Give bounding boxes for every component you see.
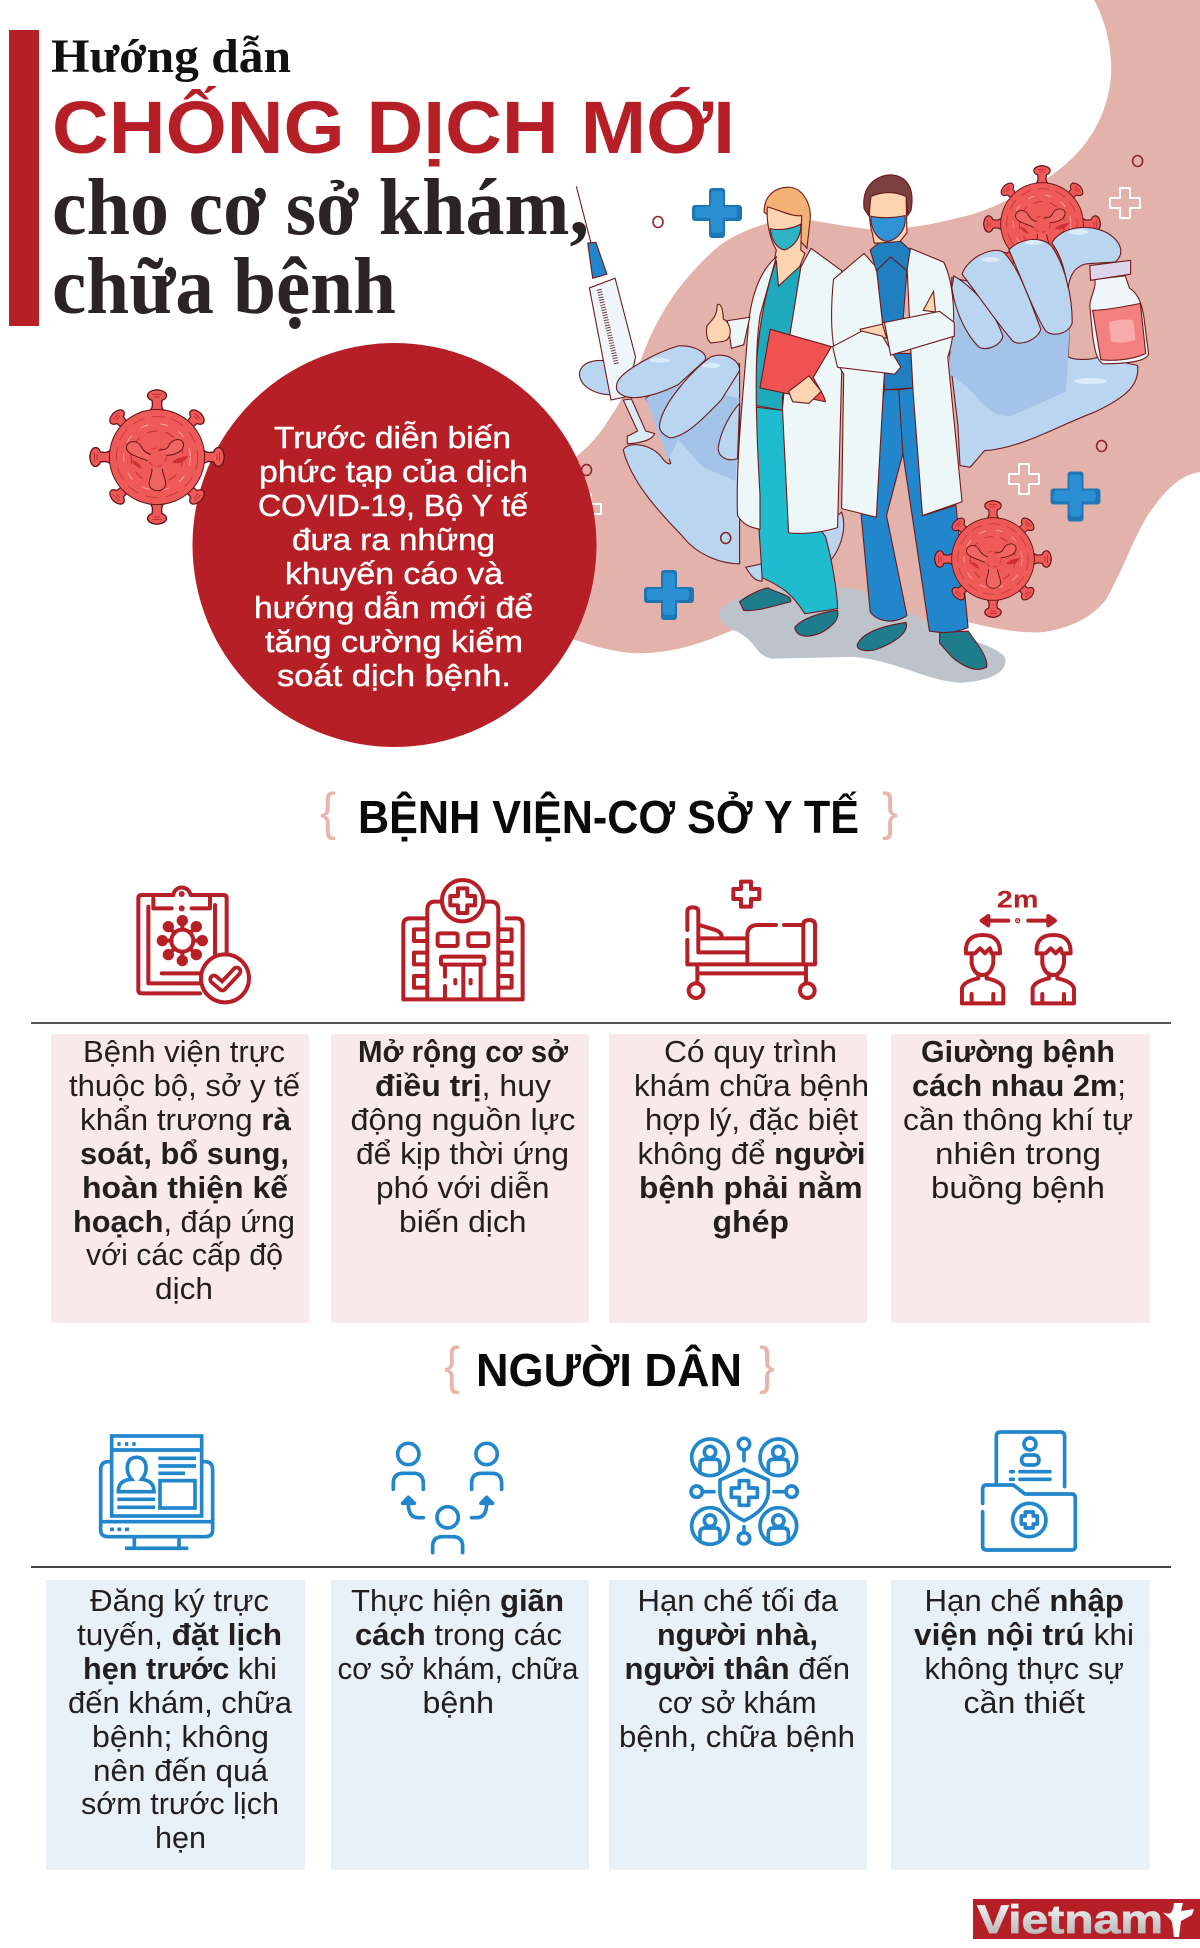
icon: clipboard with virus and check: [138, 887, 249, 1002]
card: hospital 3: bệnh phải nằm: [639, 1169, 862, 1205]
card: hospital 1: khẩn trương rà: [80, 1102, 292, 1137]
card: hospital 4: Giường bệnh: [921, 1034, 1115, 1069]
doctors and hands artwork: [576, 175, 1149, 683]
card: hospital 1: soát, bổ sung,: [80, 1136, 289, 1171]
card: citizens 1: Đăng ký trực: [90, 1583, 269, 1618]
icon: online booking monitor: [101, 1436, 213, 1548]
intro circle: Trước diễn biến: [274, 420, 511, 455]
card: hospital 2: để kịp thời ứng: [356, 1136, 569, 1171]
vial: [1090, 260, 1149, 364]
icon: two people 2m apart: [962, 886, 1074, 1003]
intro circle: phức tạp của dịch: [259, 455, 528, 489]
icons row: citizens: [101, 1436, 502, 1553]
left hand fingers: [616, 346, 740, 460]
card: hospital 4: cách nhau 2m;: [912, 1068, 1126, 1103]
card: hospital 1: Bệnh viện trực: [83, 1034, 285, 1069]
card: citizens 3: cơ sở khám: [658, 1685, 816, 1720]
card: hospital 2: động nguồn lực: [350, 1102, 576, 1137]
card: citizens 4: Hạn chế nhập: [924, 1583, 1124, 1618]
small ring decorations: [582, 156, 1143, 544]
intro circle: tăng cường kiểm: [265, 625, 523, 659]
card: hospital 4: cần thông khí tự: [903, 1102, 1133, 1137]
card: hospital 2: điều trị, huy: [375, 1068, 552, 1103]
card: citizens 3: [609, 1580, 867, 1870]
heading: citizens: }: [759, 1337, 775, 1395]
icon: virus left of circle: [90, 390, 224, 524]
title: CHỐNG DỊCH MỚI: [52, 86, 735, 169]
icon: people keeping distance: [393, 1443, 502, 1553]
icon: white cross upper: [1110, 188, 1140, 218]
intro circle: [192, 343, 596, 747]
title: cho cơ sở khám,: [52, 164, 589, 252]
icon: white cross lower: [1009, 464, 1039, 494]
icons row: citizens continued: [691, 1432, 1075, 1550]
logo: Vietnam+: Vietnam: [977, 1898, 1163, 1942]
heading: citizens: {: [444, 1337, 460, 1395]
card: hospital 3: hợp lý, đặc biệt: [645, 1102, 858, 1137]
card: citizens 1: hẹn: [155, 1820, 206, 1855]
card: hospital 2: biến dịch: [399, 1204, 526, 1239]
heading: hospitals: {: [320, 783, 336, 841]
card: citizens 2: [331, 1580, 589, 1870]
card: hospital 4: nhiên trong: [935, 1136, 1101, 1171]
left gloved hand: [580, 361, 844, 581]
icon: virus bottom: [935, 501, 1051, 617]
icon: virus behind right hand: [984, 166, 1100, 282]
icon: hospital bed: [687, 882, 815, 998]
card: citizens 1: hẹn trước khi: [83, 1651, 277, 1686]
card: hospital 2: phó với diễn: [376, 1170, 550, 1205]
title: [51, 30, 735, 331]
card: citizens 4: không thực sự: [924, 1651, 1124, 1686]
divider: [31, 1566, 1171, 1568]
card: citizens 2: cơ sở khám, chữa: [338, 1651, 579, 1686]
card: hospital 2: Mở rộng cơ sở: [358, 1034, 569, 1069]
logo: Vietnam+: [973, 1898, 1200, 1942]
title: chữa bệnh: [52, 243, 396, 331]
divider: [31, 1022, 1171, 1024]
intro circle: đưa ra những: [292, 523, 495, 557]
icon: two people 2m apart: 2m: [997, 886, 1038, 913]
card: hospital 4: buồng bệnh: [931, 1170, 1105, 1205]
icons row: hospitals: [138, 880, 523, 1002]
card: hospital 3: khám chữa bệnh: [634, 1068, 869, 1103]
icon: hospital building: [403, 880, 523, 999]
right doctor: [832, 175, 987, 669]
card: hospital 3: ghép: [712, 1204, 789, 1239]
card: hospital 1: hoạch, đáp ứng: [73, 1204, 295, 1239]
card: hospital 3: không để người: [638, 1136, 866, 1171]
icon: blue cross bottom: [644, 570, 694, 620]
intro circle: khuyến cáo và: [285, 557, 503, 591]
card: citizens 4: viện nội trú khi: [914, 1617, 1134, 1652]
title bar: [9, 30, 39, 326]
card: citizens 1: tuyến, đặt lịch: [77, 1617, 282, 1652]
card: citizens 1: sớm trước lịch: [81, 1786, 279, 1821]
intro circle: hướng dẫn mới để: [254, 590, 533, 625]
icon: white cross behind circle: [571, 494, 601, 524]
card: hospital 1: dịch: [155, 1271, 213, 1306]
card: citizens 3: người nhà,: [657, 1617, 818, 1652]
heading: hospitals: BỆNH VIỆN-CƠ SỞ Y TẾ: [358, 791, 859, 843]
card: hospital 3: [609, 1034, 869, 1323]
illustration: doctors, gloved hands, syringe and vial: [571, 156, 1149, 683]
icon: medical folder with document: [983, 1432, 1075, 1550]
card: citizens 4: cần thiết: [964, 1685, 1085, 1720]
card: hospital 1: thuộc bộ, sở y tế: [69, 1068, 300, 1103]
left doctor: [707, 187, 842, 636]
card: citizens 2: bệnh: [422, 1685, 494, 1720]
heading: hospitals: }: [882, 783, 898, 841]
card: hospital 4: [891, 1034, 1150, 1323]
icon: blue cross top: [692, 188, 742, 238]
icon: shield with linked people: [691, 1438, 797, 1544]
card: citizens 1: nên đến quá: [93, 1753, 269, 1788]
card: citizens 1: đến khám, chữa: [68, 1685, 293, 1720]
pink background blob: [560, 0, 1200, 653]
title: Hướng dẫn: [51, 30, 291, 83]
right gloved hand: [950, 227, 1138, 467]
card: citizens 1: bệnh; không: [92, 1719, 269, 1754]
intro circle: soát dịch bệnh.: [277, 659, 511, 693]
card: citizens 3: người thân đến: [624, 1651, 850, 1686]
icon: blue cross right: [1050, 472, 1100, 522]
card: citizens 3: bệnh, chữa bệnh: [619, 1719, 855, 1754]
syringe: [576, 186, 655, 444]
card: hospital 1: [51, 1034, 309, 1323]
card: citizens 4: [891, 1580, 1150, 1870]
card: citizens 2: cách trong các: [355, 1617, 562, 1652]
intro circle: COVID-19, Bộ Y tế: [258, 489, 528, 523]
card: hospital 2: [331, 1034, 589, 1323]
icons row: hospitals continued: [687, 882, 1074, 1003]
card: hospital 3: Có quy trình: [664, 1034, 837, 1069]
card: hospital 1: với các cấp độ: [86, 1237, 283, 1272]
card: hospital 1: hoàn thiện kế: [82, 1170, 289, 1205]
card: citizens 2: Thực hiện giãn: [351, 1583, 564, 1618]
floor shadow: [719, 588, 1006, 683]
heading: citizens: NGƯỜI DÂN: [476, 1344, 742, 1396]
card: citizens 1: [46, 1580, 305, 1870]
card: citizens 3: Hạn chế tối đa: [638, 1583, 839, 1618]
